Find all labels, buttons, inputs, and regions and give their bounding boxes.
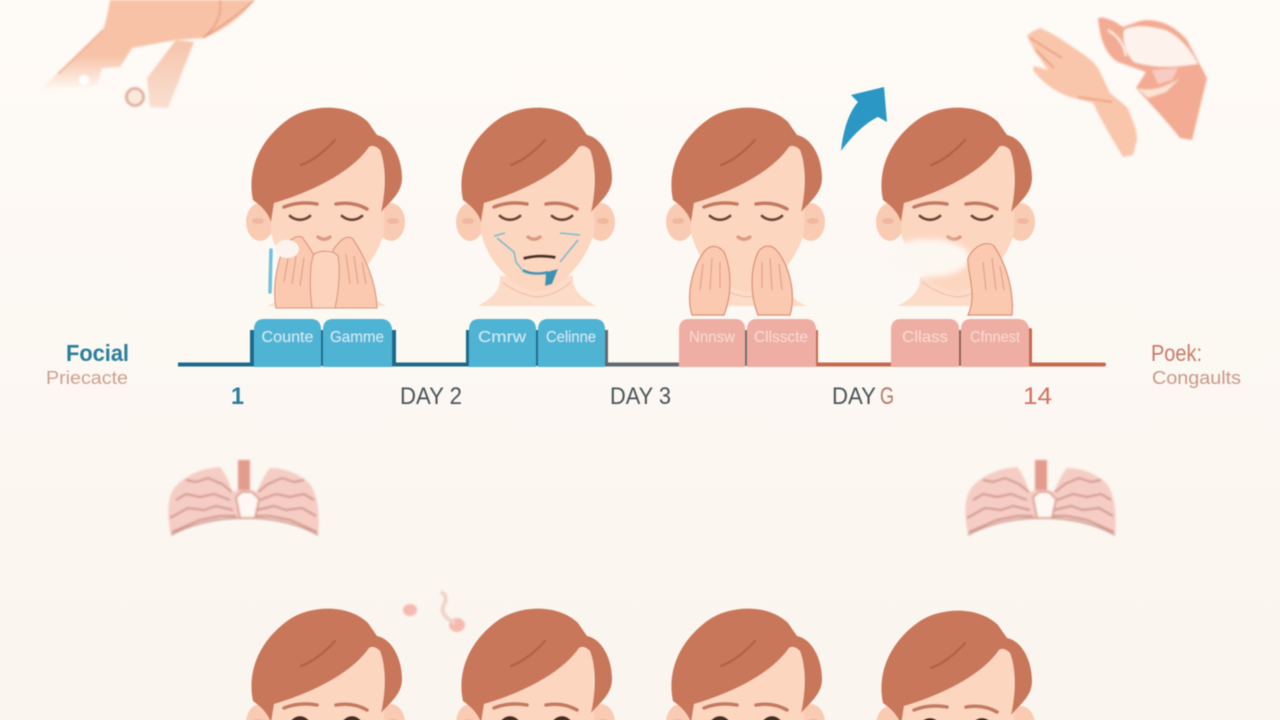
figure: day 1 head with hands [246, 108, 405, 308]
block: day 3 first [679, 319, 745, 367]
block: day 2 first: Cmrw [478, 329, 527, 346]
block: day 2 second: Celinne [546, 329, 596, 346]
label: day axis [231, 383, 1052, 410]
block: day 2 second [538, 319, 605, 367]
label: day axis: DAY [832, 383, 876, 410]
block: day 4 first [891, 319, 959, 367]
label: left legend [46, 340, 129, 388]
label: left legend: Focial [66, 340, 129, 366]
figure: bottom row head 2 [456, 609, 615, 720]
icon: top-right hands [1027, 18, 1207, 157]
block: day 3 second [747, 319, 816, 367]
figure: bottom row head 4 [876, 611, 1035, 720]
label: right legend: Congaults [1152, 368, 1241, 388]
label: left legend: Priecacte [46, 368, 128, 388]
label: right legend [1151, 340, 1241, 388]
icon: top-left hand [40, 0, 254, 108]
label: right legend: Poek: [1151, 340, 1202, 366]
label: day axis: G [880, 383, 894, 410]
block: day 1 second [323, 319, 392, 367]
block: day 1 second: Gamme [330, 329, 384, 346]
figure: bottom row head 3 [666, 609, 825, 720]
figure: day 4 head with foam and hand [876, 108, 1035, 315]
icon: pink symptom marks [403, 592, 465, 632]
arrow: upward blue arrow [841, 87, 887, 151]
block: day 3 first: Nnnsw [689, 329, 735, 346]
block: day 1 first [254, 319, 321, 367]
block: day 4 second: Cfnnest [970, 329, 1021, 346]
figure: bottom row head 1 [246, 609, 405, 720]
label: day axis: 14 [1023, 383, 1052, 410]
icon: right lungs [965, 460, 1116, 535]
figures: bottom row heads [246, 609, 1035, 720]
label: day axis: DAY 3 [610, 383, 671, 410]
block: day 3 second: Cllsscte [754, 329, 808, 346]
icon: left lungs [168, 460, 319, 535]
figure: day 3 head with hands on chin [666, 108, 825, 315]
block: day 4 second [961, 319, 1029, 367]
timeline chart [178, 319, 1104, 367]
block: day 2 first [469, 319, 536, 367]
label: day axis: DAY 2 [400, 383, 462, 410]
block: day 1 first: Counte [262, 329, 314, 346]
label: day axis: 1 [231, 383, 244, 410]
figure: day 2 head with cracked skin [456, 108, 615, 306]
block: day 4 first: Cllass [902, 329, 948, 346]
